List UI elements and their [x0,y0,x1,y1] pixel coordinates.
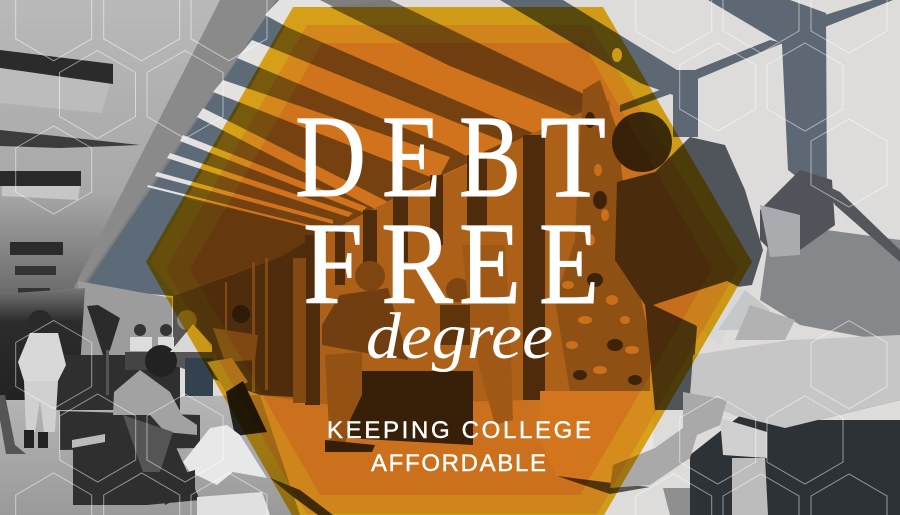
title: DEBT: B [459,91,521,222]
subtitle: KEEPING COLLEGE [327,417,591,444]
title: DEBT: E [382,91,441,222]
rafter ceiling [80,0,600,296]
title: FREE: R [381,198,453,329]
bench and table [60,411,200,505]
colonnade columns [305,135,545,405]
diagonal concrete beam [70,0,280,295]
standing student with curly hair [612,112,770,410]
plant [555,48,650,392]
title: FREE [303,198,599,329]
skylight stripes [147,0,590,229]
ceiling light fixtures [0,50,140,294]
potted plant and back students [87,305,174,395]
left floor [0,395,300,515]
brick wall [78,281,172,360]
title: FREE: E [539,198,599,329]
seated man in sweater [322,261,408,452]
title: DEBT: T [540,91,606,222]
standing man in centre [440,245,513,425]
title: degree script: degree [366,300,553,373]
title: DEBT [295,91,606,222]
student in white skirt [183,425,267,485]
central bench [345,371,473,445]
title: DEBT: D [295,91,366,222]
blue-tinted rafters beside hexagon [85,0,296,296]
standing student in white jacket [0,310,66,454]
planter [540,391,653,494]
subtitle: AFFORDABLE [371,450,546,477]
dark interior left [0,288,85,400]
seated man reading [72,345,197,472]
title: FREE: E [459,198,521,329]
window mullions right [500,0,893,200]
low rafters [85,190,330,296]
stacked orange hexagons [146,7,752,515]
students in colonnade [170,305,267,436]
beam over hexagon top [330,0,590,115]
seated student with braid [610,170,900,515]
concrete ceiling [0,0,280,295]
title: FREE: F [303,198,363,329]
subtitle [327,417,591,477]
colonnade wall [173,100,610,405]
shoes and shadows on floor [160,470,333,515]
